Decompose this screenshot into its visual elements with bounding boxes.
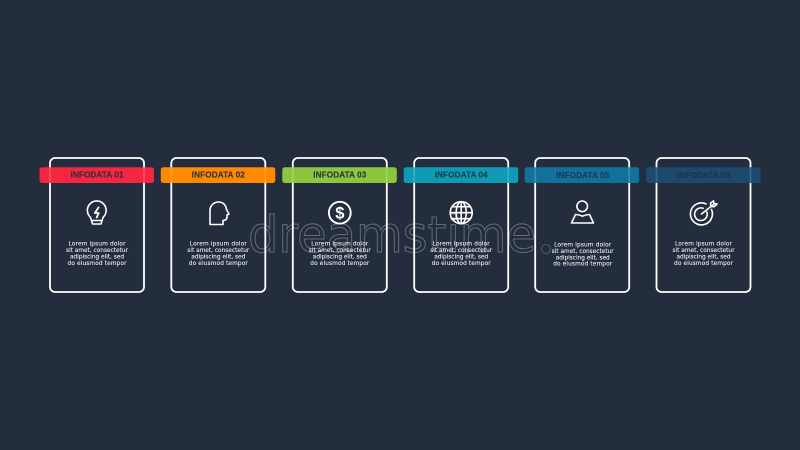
text block 01: sit amet, consectetur [66, 248, 129, 254]
text block 02: adipiscing elit, sed [191, 254, 246, 260]
text block 01: adipiscing elit, sed [70, 254, 124, 260]
card outline 04 [414, 158, 508, 292]
icon: light bulb [87, 201, 106, 224]
text block 03 [309, 242, 371, 267]
card edge over ribbon 02 [171, 167, 265, 183]
panel: infodata 02 [161, 158, 275, 292]
card outline 06 [656, 158, 750, 292]
card edge over ribbon 04 [414, 167, 508, 183]
ribbon 02 [161, 167, 275, 183]
card edge over ribbon 06 [656, 167, 750, 183]
panel: infodata 06 [646, 158, 760, 292]
text block 06 [672, 242, 735, 267]
card outline 03 [293, 158, 387, 292]
text block 01 [66, 242, 129, 267]
text block 05: adipiscing elit, sed [556, 255, 610, 261]
card outline 01 [50, 158, 144, 292]
heading 01: INFODATA 01 [70, 170, 124, 180]
card edge over ribbon 03 [293, 167, 387, 183]
heading 02: INFODATA 02 [192, 170, 245, 180]
icon: dollar coin: $ [335, 204, 344, 222]
text block 03: sit amet, consectetur [309, 248, 371, 254]
text block 06: sit amet, consectetur [672, 248, 735, 254]
text block 04: sit amet, consectetur [430, 248, 493, 254]
text block 03: do eiusmod tempor [310, 261, 370, 267]
text block 04 [430, 242, 493, 267]
card edge over ribbon 01 [50, 167, 144, 183]
card outline 05 [535, 158, 629, 292]
panel: infodata 04 [404, 158, 518, 292]
text block 05 [552, 242, 614, 268]
ribbon 01 [40, 167, 154, 183]
ribbon 03 [282, 167, 397, 183]
heading 05: INFODATA 05 [556, 171, 610, 180]
text block 05: sit amet, consectetur [552, 249, 614, 255]
card outline 02 [171, 158, 265, 292]
heading 06: INFODATA 06 [677, 171, 730, 180]
text block 02: Lorem ipsum dolor [190, 242, 247, 248]
text block 02: do eiusmod tempor [189, 261, 248, 267]
panel: infodata 03 [282, 158, 397, 292]
ribbon 05 [525, 167, 639, 183]
ribbon 06 [646, 167, 760, 183]
icon: globe [450, 202, 472, 224]
icon: head profile [210, 202, 229, 224]
text block 02: sit amet, consectetur [187, 248, 250, 254]
text block 06: adipiscing elit, sed [676, 254, 731, 260]
ribbon 04 [404, 167, 518, 183]
text block 05: Lorem ipsum dolor [554, 242, 612, 248]
text block 05: do eiusmod tempor [553, 262, 613, 268]
text block 01: do eiusmod tempor [68, 261, 127, 267]
heading 03: INFODATA 03 [313, 170, 367, 180]
text block 03: adipiscing elit, sed [313, 254, 367, 260]
icon: person on map [572, 201, 594, 223]
text block 06: do eiusmod tempor [674, 261, 734, 267]
panel: infodata 01 [40, 158, 154, 292]
icon: target with arrow [690, 201, 717, 225]
text block 04: do eiusmod tempor [432, 261, 491, 267]
heading 04: INFODATA 04 [435, 170, 488, 180]
text block 04: adipiscing elit, sed [434, 254, 489, 260]
text block 06: Lorem ipsum dolor [675, 242, 733, 248]
card edge over ribbon 05 [535, 167, 629, 183]
watermark: dreamstime [248, 206, 536, 264]
text block 01: Lorem ipsum dolor [68, 242, 126, 248]
text block 02 [187, 242, 250, 267]
text block 04: Lorem ipsum dolor [433, 242, 490, 248]
panel: infodata 05 [525, 158, 639, 292]
text block 03: Lorem ipsum dolor [311, 242, 369, 248]
